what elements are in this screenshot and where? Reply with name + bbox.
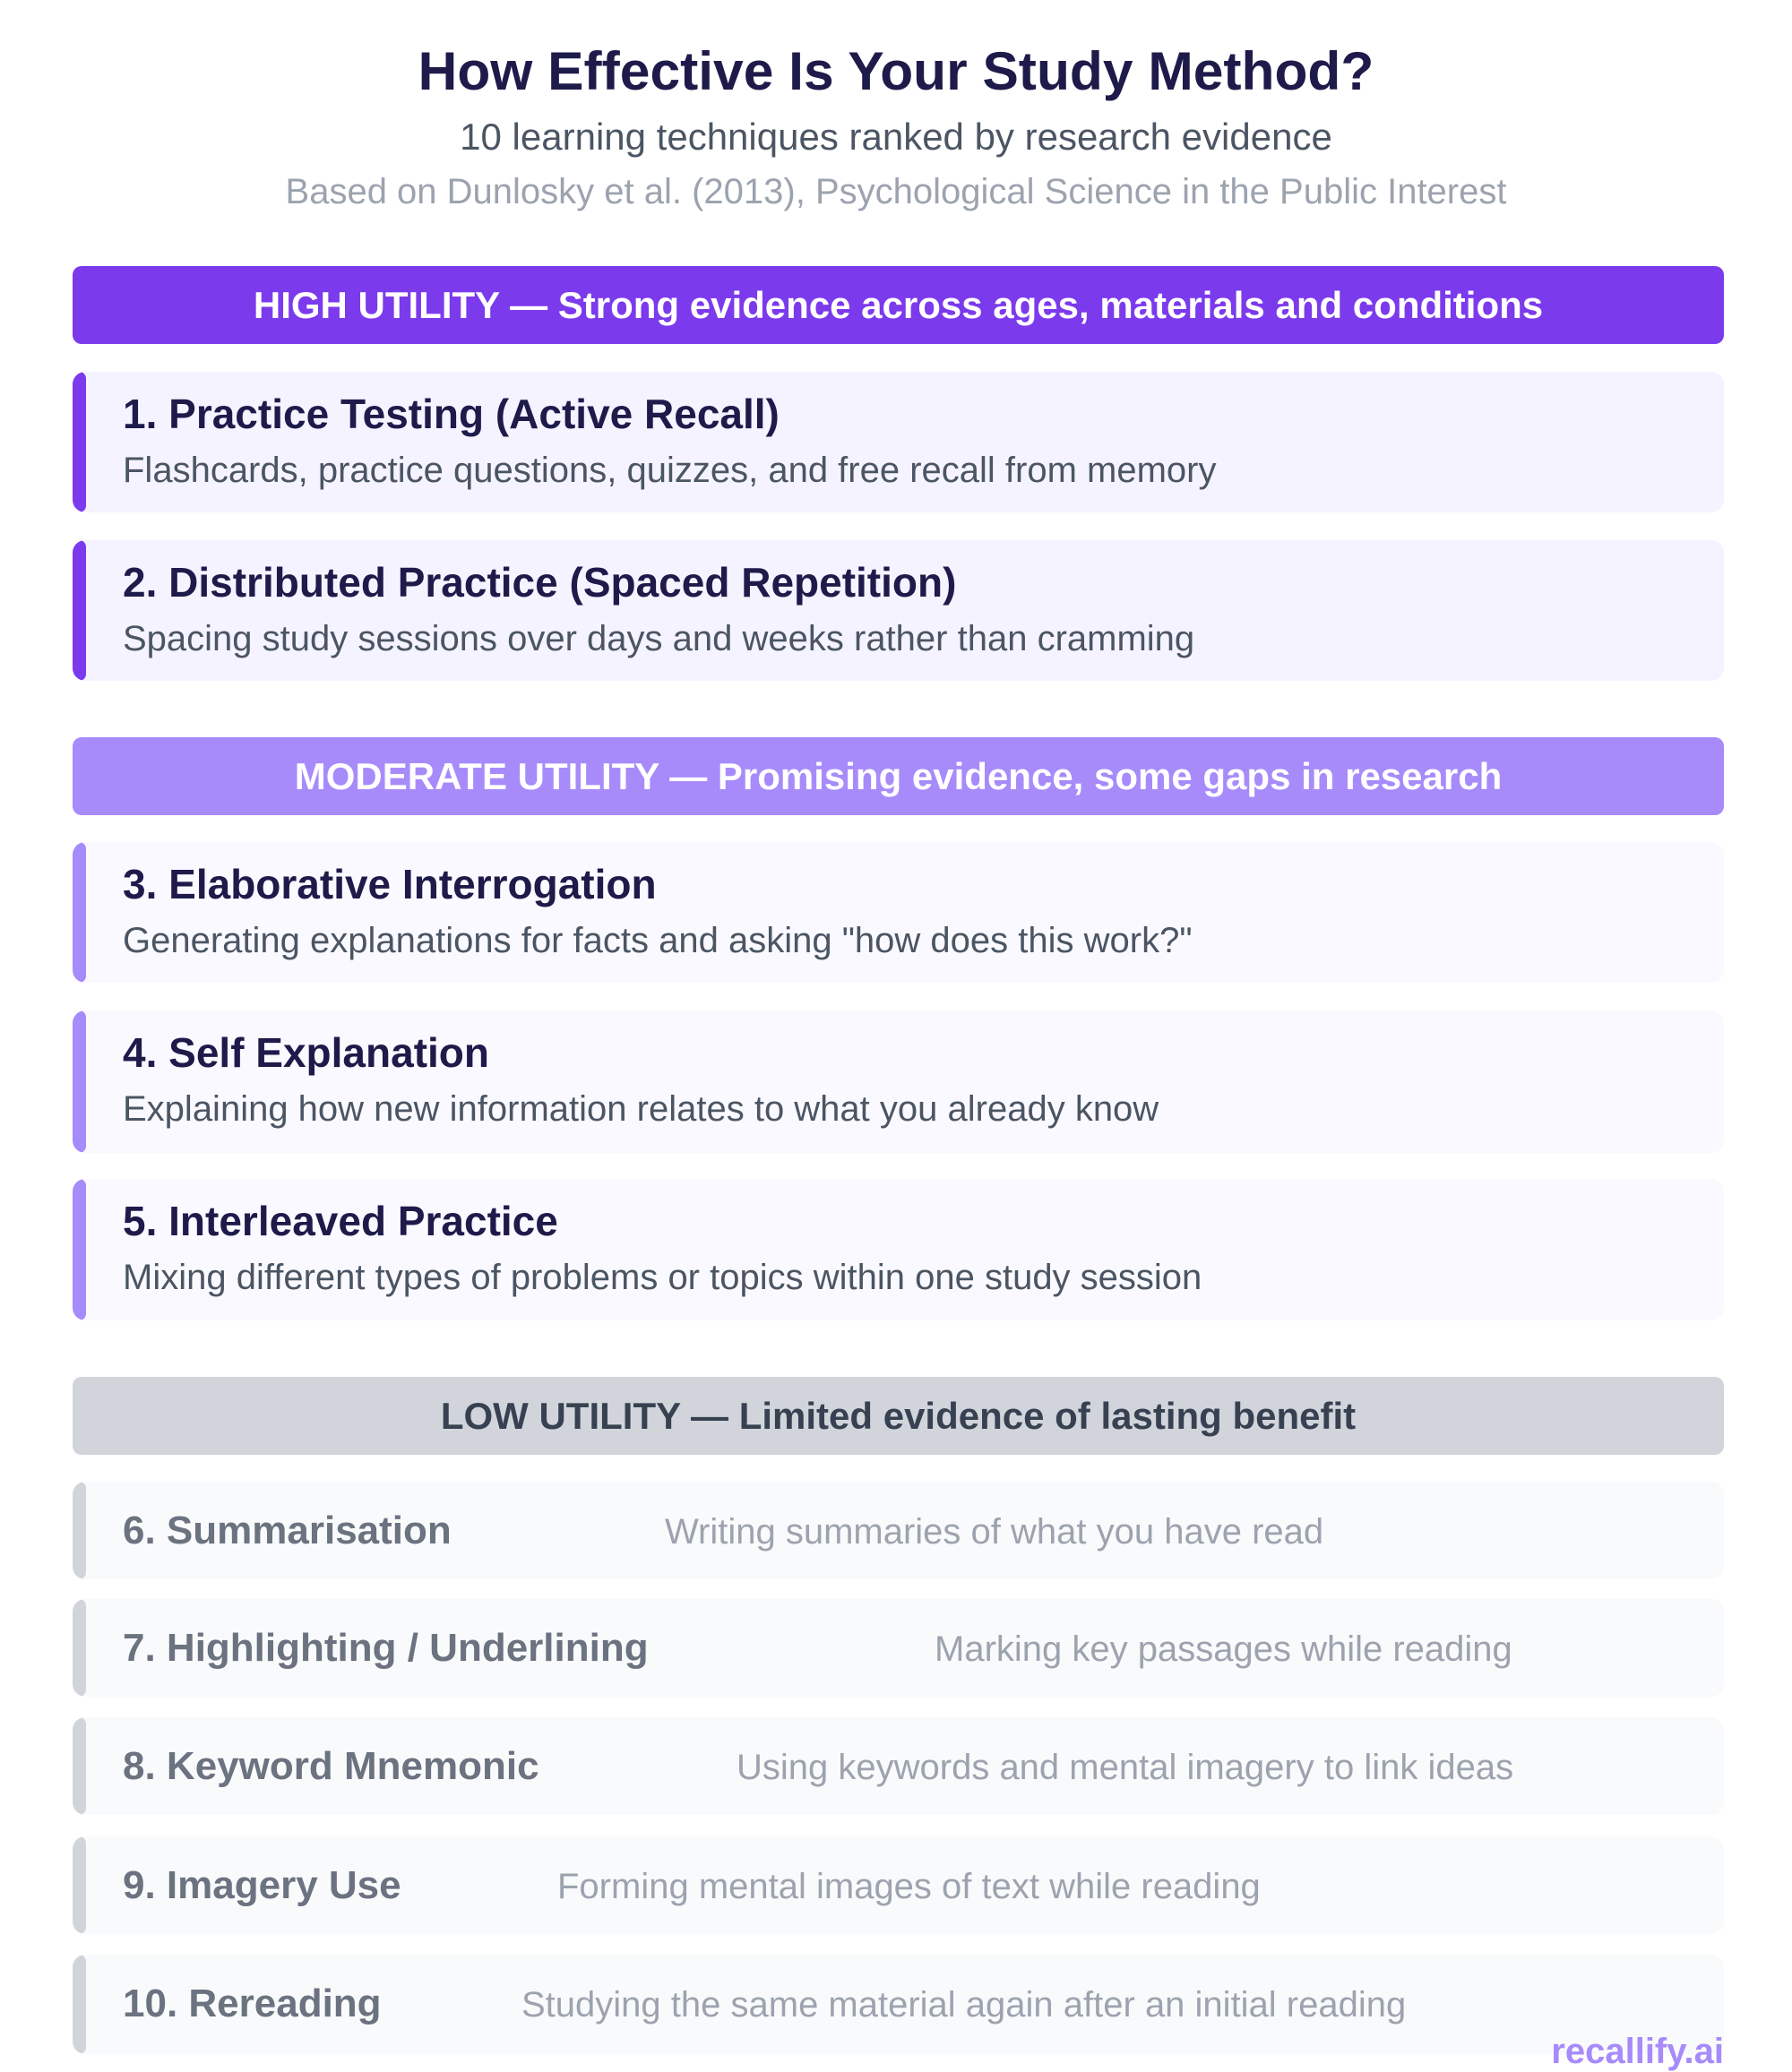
title: How Effective Is Your Study Method? [418, 40, 1374, 101]
card desc: Flashcards, practice questions, quizzes, and free recall from memory [123, 451, 1217, 490]
card: distributed practice [73, 540, 1724, 681]
card title: 3. Elaborative Interrogation [123, 861, 657, 907]
card title: 5. Interleaved Practice [123, 1198, 558, 1244]
brand: recallify.ai [1551, 2032, 1724, 2071]
card: elaborative interrogation [73, 842, 1724, 983]
card desc: Generating explanations for facts and asking "how does this work?" [123, 921, 1193, 960]
header: high utility: HIGH UTILITY — Strong evidence across ages, materials and conditions [254, 283, 1543, 326]
source: Based on Dunlosky et al. (2013), Psychological Science in the Public Interest [286, 172, 1506, 211]
card desc: Mixing different types of problems or topics within one study session [123, 1258, 1202, 1297]
card desc: Spacing study sessions over days and weeks rather than cramming [123, 619, 1194, 658]
card: keyword mnemonic [73, 1717, 1724, 1815]
subtitle: 10 learning techniques ranked by research evidence [460, 116, 1332, 158]
header: low utility [73, 1377, 1724, 1455]
card desc: Marking key passages while reading [935, 1629, 1512, 1669]
header: moderate utility [73, 737, 1724, 815]
card: practice testing [73, 372, 1724, 512]
card: self explanation [73, 1010, 1724, 1153]
card: summarisation [73, 1482, 1724, 1579]
card title: 6. Summarisation [123, 1509, 452, 1552]
card title: 1. Practice Testing (Active Recall) [123, 391, 780, 437]
header: low utility: LOW UTILITY — Limited evidence of lasting benefit [441, 1394, 1356, 1437]
card title: 4. Self Explanation [123, 1029, 489, 1076]
card desc: Explaining how new information relates to what you already know [123, 1089, 1159, 1129]
card title: 8. Keyword Mnemonic [123, 1744, 539, 1788]
card title: 10. Rereading [123, 1982, 382, 2025]
card title: 2. Distributed Practice (Spaced Repetition) [123, 559, 956, 606]
card desc: Using keywords and mental imagery to link ideas [737, 1748, 1513, 1787]
card: highlighting [73, 1599, 1724, 1697]
card: imagery use [73, 1836, 1724, 1934]
header: high utility [73, 266, 1724, 344]
card desc: Studying the same material again after an initial reading [521, 1985, 1406, 2025]
header: moderate utility: MODERATE UTILITY — Promising evidence, some gaps in research [295, 754, 1502, 797]
card desc: Forming mental images of text while reading [557, 1867, 1261, 1906]
card title: 9. Imagery Use [123, 1863, 401, 1907]
card title: 7. Highlighting / Underlining [123, 1626, 649, 1670]
card: rereading [73, 1955, 1724, 2054]
card desc: Writing summaries of what you have read [665, 1512, 1323, 1552]
card: interleaved practice [73, 1179, 1724, 1320]
